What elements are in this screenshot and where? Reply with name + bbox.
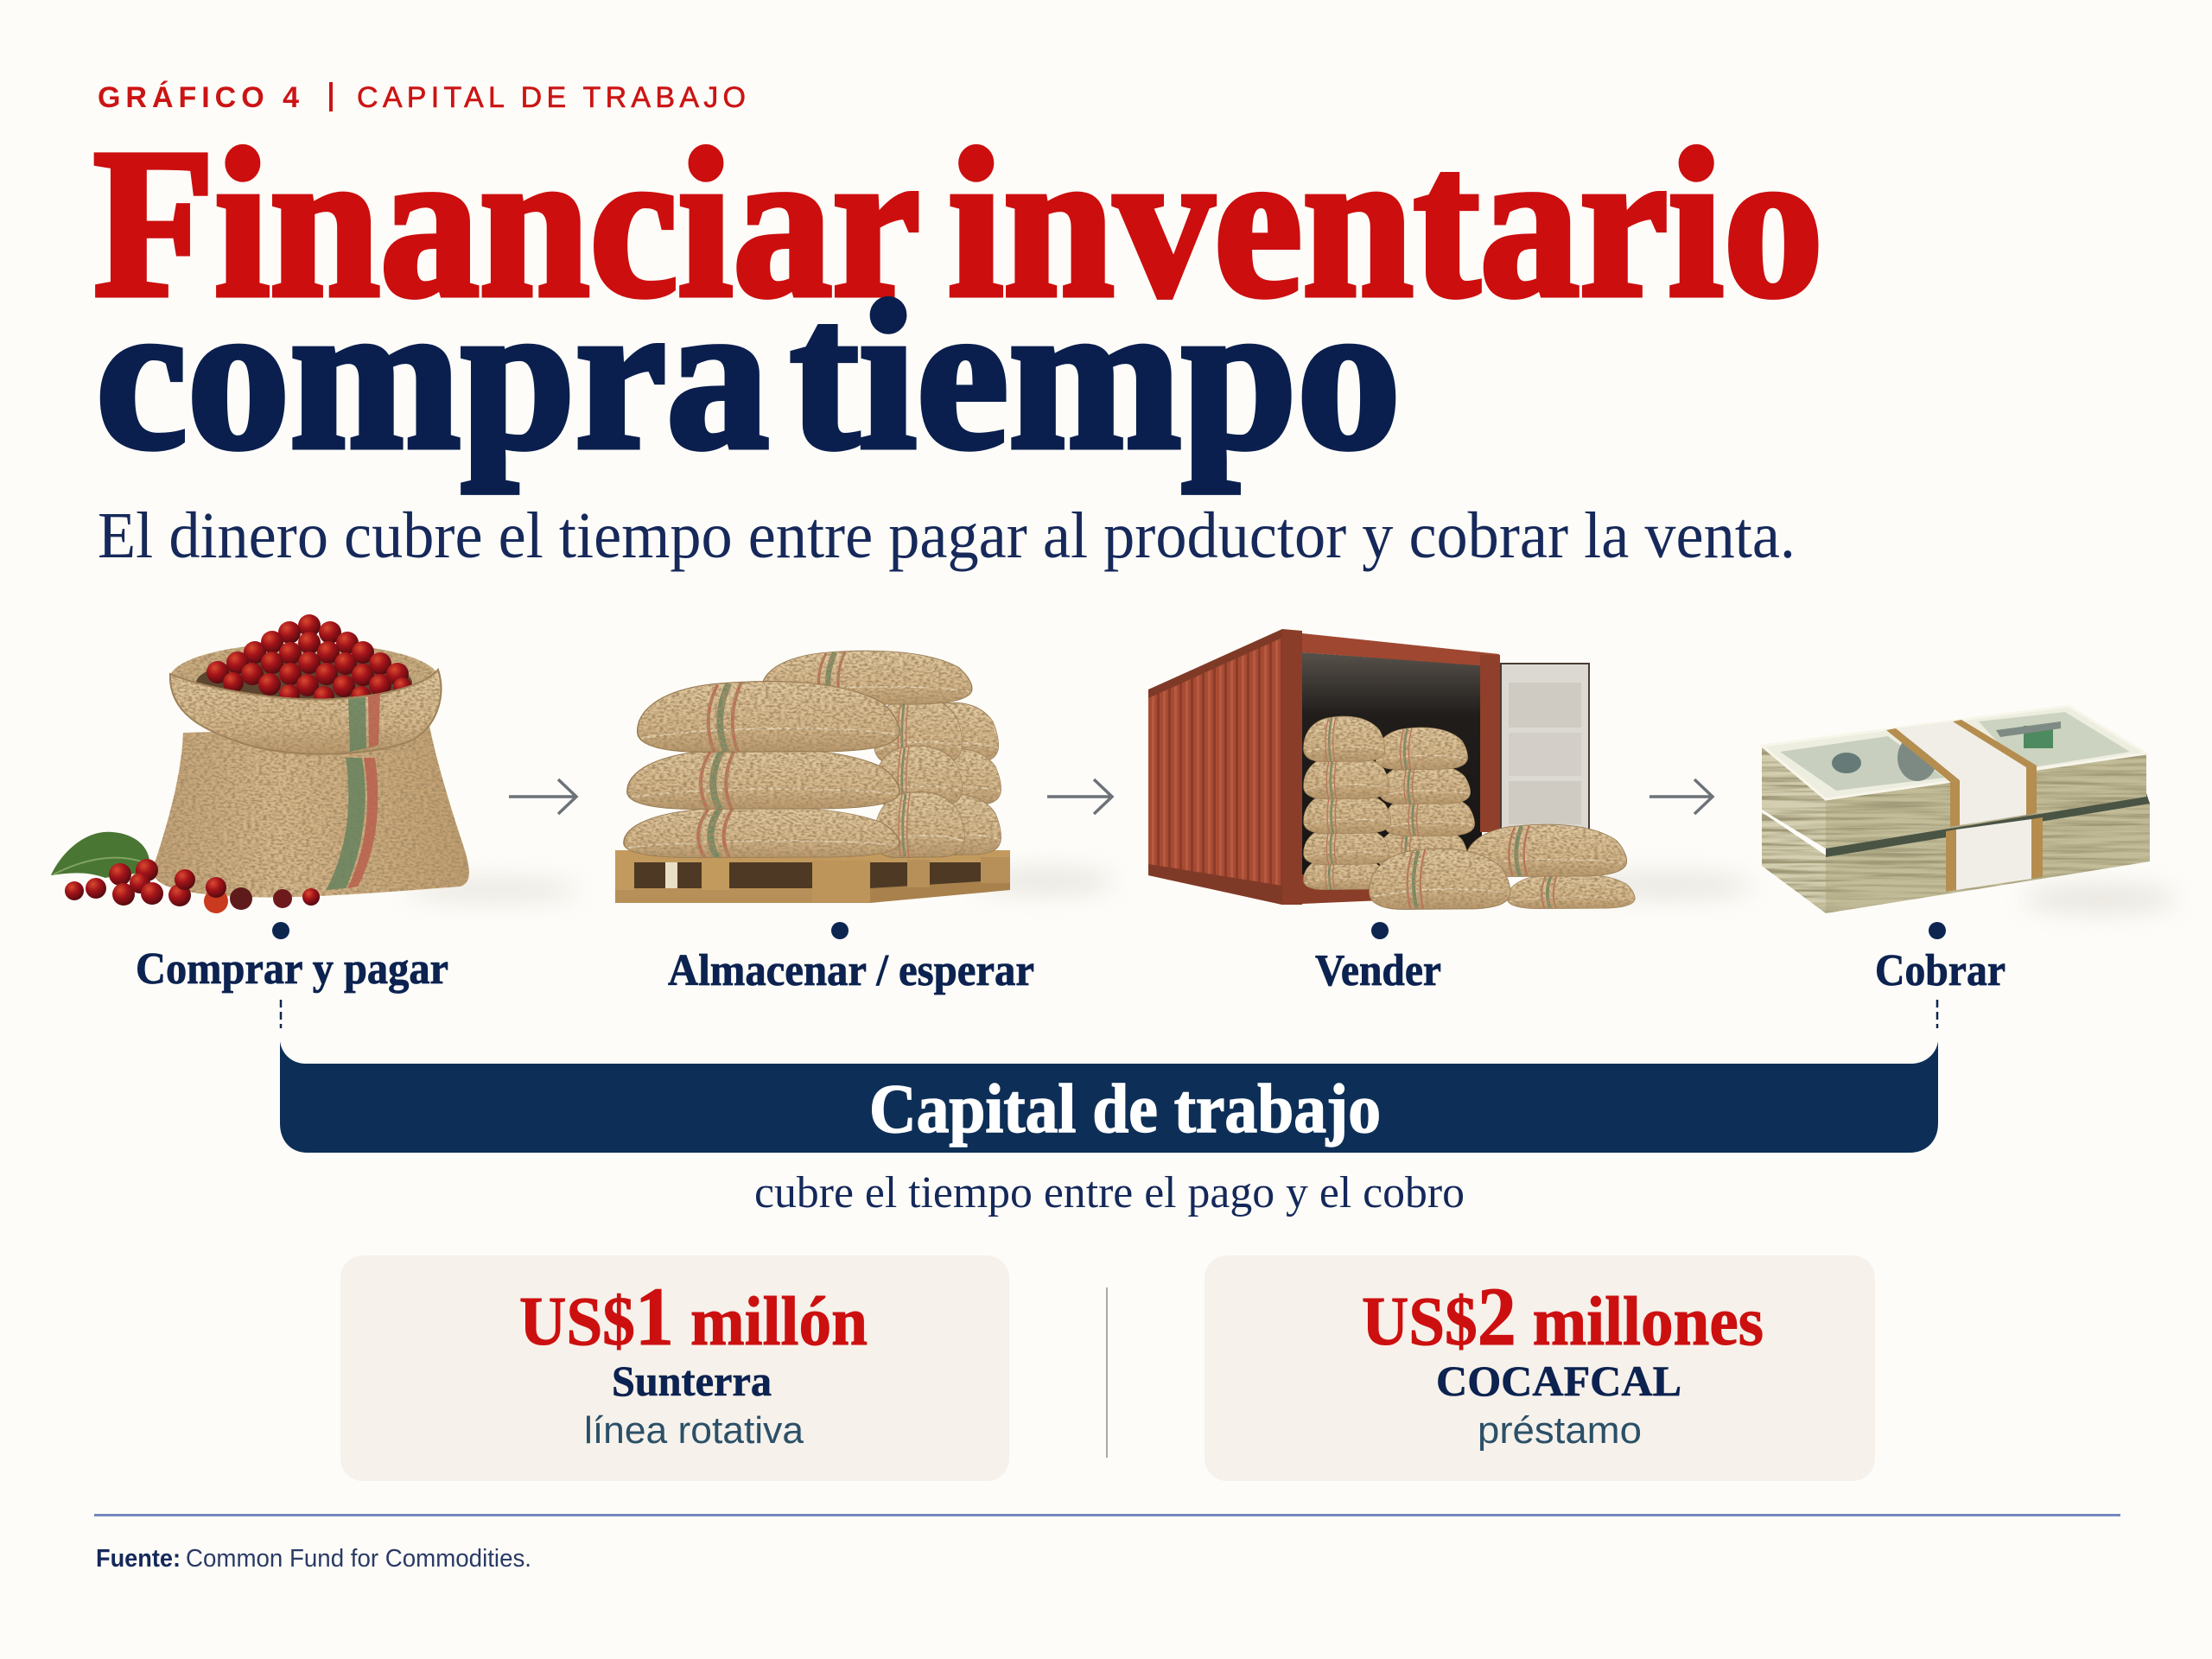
title line 1: Financiar <box>93 106 920 341</box>
kicker: CAPITAL DE TRABAJO <box>357 81 746 114</box>
panel: Sunterra: línea rotativa <box>584 1409 804 1452</box>
subtitle: El dinero cubre el tiempo entre pagar al productor y cobrar la venta. <box>98 499 1796 572</box>
source note: Common Fund for Commodities. <box>186 1545 531 1573</box>
title line 2: tiempo <box>790 258 1401 493</box>
pallet <box>615 850 1010 903</box>
title line 2 <box>96 258 1401 493</box>
kicker <box>98 81 746 114</box>
bracket bar: capital de trabajo: Capital de trabajo <box>869 1071 1381 1147</box>
icon: burlap bag with coffee cherries <box>51 614 469 913</box>
title line 1: inventario <box>948 106 1823 341</box>
panel: Sunterra: US$1 millón <box>519 1270 868 1363</box>
bracket bar: capital de trabajo <box>280 1041 1938 1153</box>
arrow 1 <box>509 779 576 814</box>
sacks inside <box>1303 716 1635 909</box>
timeline dot and label: Almacenar / esperar: Almacenar / esperar <box>668 946 1034 995</box>
timeline dot and label: Cobrar: Cobrar <box>1875 946 2005 995</box>
timeline dot and label: Vender <box>1315 922 1441 995</box>
panel: Sunterra: Sunterra <box>612 1357 772 1405</box>
icon: shipping container <box>1148 629 1635 909</box>
leaf <box>51 832 149 878</box>
cherries mound <box>207 614 412 707</box>
panel: Sunterra <box>340 1255 1009 1481</box>
loose cherries <box>65 859 320 913</box>
title line 2: compra <box>96 258 769 493</box>
icon: sacks on pallet <box>615 651 1010 903</box>
icon: stacks of dollar bills <box>1762 706 2150 913</box>
arrow 2 <box>1047 779 1112 814</box>
timeline dot and label: Comprar y pagar <box>136 922 448 994</box>
floor shadows <box>406 869 2177 912</box>
timeline dot and label: Almacenar / esperar <box>668 922 1034 995</box>
title line 1 <box>93 106 1823 341</box>
bracket caption: cubre el tiempo entre el pago y el cobro <box>754 1168 1465 1217</box>
arrow 3 <box>1649 779 1713 814</box>
timeline dot and label: Comprar y pagar: Comprar y pagar <box>136 944 448 994</box>
panel: COCAFCAL <box>1205 1255 1875 1481</box>
panel: COCAFCAL: préstamo <box>1478 1409 1642 1452</box>
timeline dot and label: Cobrar <box>1875 922 2005 995</box>
upper stack <box>1762 746 2146 849</box>
lower stack <box>1762 802 2150 913</box>
panel: COCAFCAL: US$2 millones <box>1362 1270 1764 1363</box>
timeline dot and label: Vender: Vender <box>1315 946 1441 995</box>
source note: Fuente: <box>96 1545 181 1573</box>
open door <box>1501 664 1589 830</box>
panel: COCAFCAL: COCAFCAL <box>1436 1357 1681 1405</box>
kicker: GRÁFICO 4 <box>98 81 299 114</box>
